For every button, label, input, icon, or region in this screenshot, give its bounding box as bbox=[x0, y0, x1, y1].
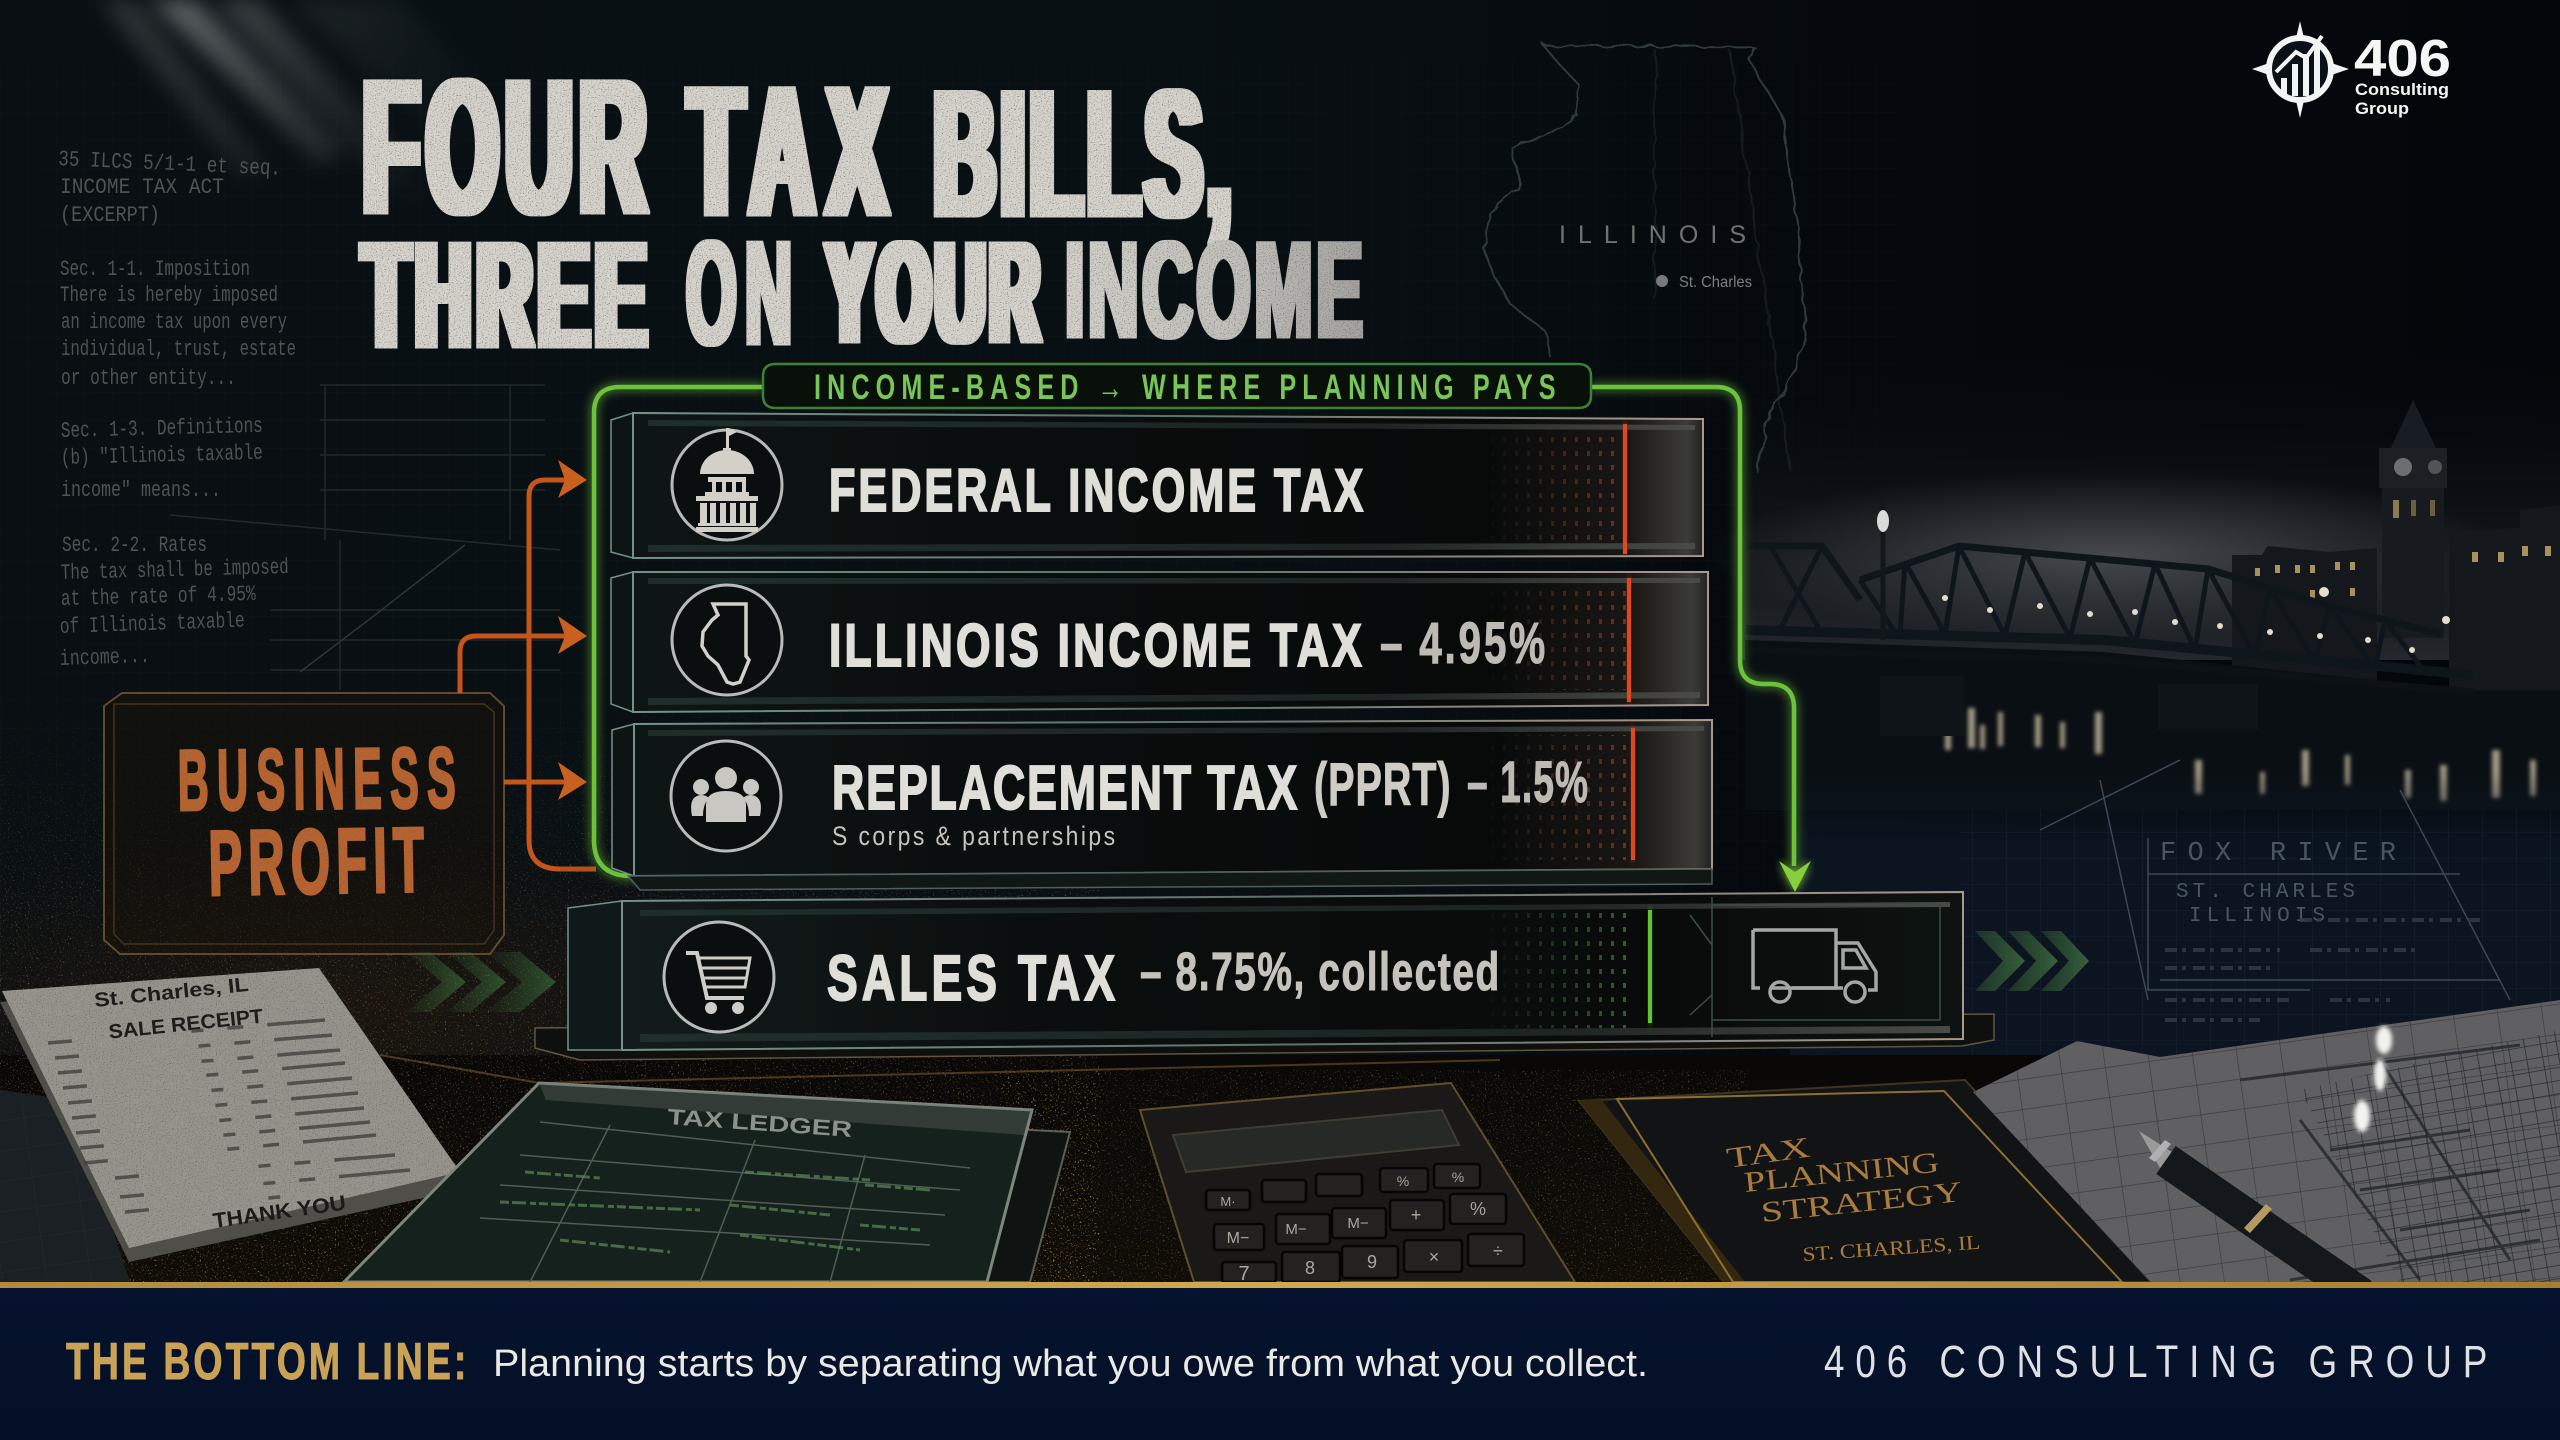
key labels: ÷ bbox=[1493, 1241, 1503, 1261]
key labels: × bbox=[1429, 1247, 1439, 1267]
faded statute excerpt: at the rate of 4.95% bbox=[61, 582, 257, 612]
chevrons: right bbox=[1975, 931, 2089, 991]
key labels: + bbox=[1411, 1205, 1421, 1225]
title: heavy words: TAX bbox=[689, 48, 887, 255]
title: heavy words: BILLS, bbox=[934, 52, 1231, 254]
paper glare bbox=[2354, 1026, 2392, 1132]
sale receipt: SALE RECEIPT bbox=[108, 1006, 264, 1044]
icon: delivery truck bbox=[1753, 930, 1876, 1002]
light rays bbox=[100, 0, 560, 200]
faded statute excerpt: INCOME TAX ACT bbox=[60, 175, 224, 200]
title: heavy words: THREE bbox=[363, 212, 646, 380]
faded statute excerpt: 35 ILCS 5/1-1 et seq. bbox=[58, 147, 282, 182]
title: tighter words: INCOME bbox=[1065, 215, 1363, 367]
book: Tax Planning Strategy bbox=[1579, 1080, 2151, 1282]
river under the bridge bbox=[1745, 640, 2560, 810]
sale receipt bbox=[0, 968, 460, 1262]
key labels: % bbox=[1452, 1169, 1464, 1185]
faded statute excerpt: or other entity... bbox=[61, 366, 236, 391]
faded statute excerpt: Sec. 1-3. Definitions bbox=[61, 414, 263, 444]
key labels bbox=[1220, 1169, 1503, 1285]
icon: compass with chart bbox=[2252, 21, 2349, 118]
book: Tax Planning Strategy: ST. CHARLES, IL bbox=[1802, 1232, 1981, 1266]
blueprint tiny notes bbox=[2165, 920, 2480, 1020]
title: tighter words bbox=[686, 212, 1363, 376]
desk surface bbox=[0, 680, 2100, 1285]
orange flow arrows bbox=[460, 460, 596, 869]
faded statute excerpt: (b) "Illinois taxable bbox=[61, 441, 263, 471]
blueprint overlay: Fox River bbox=[1790, 760, 2560, 1060]
title: heavy words: YOUR bbox=[827, 211, 1039, 373]
clock tower bbox=[2379, 400, 2447, 638]
key labels: M− bbox=[1347, 1215, 1369, 1232]
bottom line bar bbox=[0, 1282, 2560, 1440]
key labels: 7 bbox=[1238, 1263, 1250, 1285]
sale receipt: THANK YOU bbox=[211, 1192, 347, 1233]
business profit box: BUSINESS bbox=[177, 730, 456, 829]
business profit box: PROFIT bbox=[208, 808, 425, 915]
faded statute excerpt: individual, trust, estate bbox=[61, 337, 296, 362]
panel: illinois income tax: – 4.95% bbox=[1380, 611, 1545, 676]
panel: federal income tax bbox=[611, 413, 1703, 558]
panel: sales tax: SALES TAX bbox=[827, 943, 1115, 1014]
map marker: St. Charles: St. Charles bbox=[1679, 274, 1752, 291]
faded statute excerpt: (EXCERPT) bbox=[60, 203, 160, 228]
key labels: 9 bbox=[1367, 1252, 1377, 1272]
panel: replacement tax bbox=[612, 720, 1712, 890]
Illinois map outline bbox=[1483, 45, 1806, 473]
faded statute excerpt: income... bbox=[59, 644, 150, 672]
street lamp bbox=[1880, 497, 1886, 640]
green income frame bbox=[594, 387, 1794, 876]
bridge truss bbox=[1746, 497, 2473, 692]
title bbox=[363, 40, 1363, 380]
blueprint floor plan bbox=[2300, 1030, 2560, 1282]
receipt item rows bbox=[48, 1020, 410, 1212]
blueprint paper under receipt bbox=[0, 1090, 130, 1282]
faded statute excerpt: Sec. 1-1. Imposition bbox=[60, 257, 250, 282]
wordmark: Consulting bbox=[2355, 80, 2449, 99]
faded statute excerpt bbox=[58, 147, 296, 672]
arrowheads bbox=[558, 460, 587, 800]
ledger rules and entries bbox=[480, 1122, 970, 1282]
wordmark: Group bbox=[2355, 99, 2409, 118]
business profit box bbox=[104, 693, 504, 954]
faint ledger and chart behind business profit bbox=[170, 385, 560, 690]
faded statute excerpt: The tax shall be imposed bbox=[61, 555, 289, 586]
icon: Illinois outline bbox=[672, 585, 782, 695]
river light reflections bbox=[1945, 708, 2536, 801]
logo: 406 Consulting Group bbox=[2252, 21, 2451, 118]
panel: replacement tax: (PPRT) bbox=[1314, 751, 1451, 818]
key labels: M· bbox=[1220, 1194, 1236, 1209]
book: Tax Planning Strategy: STRATEGY bbox=[1759, 1176, 1964, 1229]
title: heavy words bbox=[363, 40, 1231, 380]
panel: replacement tax: S corps & partnerships bbox=[832, 821, 1115, 851]
key labels: M− bbox=[1285, 1221, 1307, 1238]
panel: replacement tax: – 1.5% bbox=[1467, 751, 1588, 815]
panel: sales tax: – 8.75%, collected bbox=[1140, 941, 1499, 1001]
key labels: % bbox=[1397, 1173, 1409, 1189]
faded statute excerpt: Sec. 2-2. Rates bbox=[62, 533, 207, 558]
title: tighter words: ON bbox=[686, 212, 792, 376]
key labels: % bbox=[1470, 1199, 1486, 1219]
tax ledger bbox=[344, 1083, 1070, 1282]
icon: capitol bbox=[672, 428, 782, 540]
pen bbox=[2139, 1131, 2362, 1295]
faded statute excerpt: income" means... bbox=[61, 478, 221, 503]
faded statute excerpt: There is hereby imposed bbox=[60, 283, 278, 308]
panel: illinois income tax bbox=[611, 572, 1708, 712]
icon: shopping cart bbox=[664, 922, 774, 1032]
bridge lights bbox=[1942, 587, 2450, 653]
bottom line label: THE BOTTOM LINE: bbox=[66, 1332, 466, 1390]
panel: federal income tax: FEDERAL INCOME TAX bbox=[829, 458, 1363, 525]
green arrowhead to sales panel bbox=[1779, 861, 1811, 892]
book: Tax Planning Strategy: TAX bbox=[1725, 1132, 1812, 1175]
map label: Illinois: ILLINOIS bbox=[1559, 221, 1746, 249]
night scene: river, bridge and clock tower bbox=[1745, 400, 2560, 810]
bridge piers bbox=[1880, 676, 2258, 736]
faded statute excerpt: an income tax upon every bbox=[61, 310, 287, 335]
blueprint overlay: Fox River: ST. CHARLES bbox=[2176, 881, 2355, 904]
calculator bbox=[1140, 1083, 1575, 1285]
panel: illinois income tax: ILLINOIS INCOME TAX bbox=[829, 613, 1362, 680]
book: Tax Planning Strategy: PLANNING bbox=[1742, 1147, 1941, 1199]
wordmark bbox=[2354, 30, 2451, 118]
tax ledger: TAX LEDGER bbox=[667, 1104, 853, 1142]
keys bbox=[1206, 1164, 1524, 1282]
key labels: M− bbox=[1227, 1230, 1249, 1247]
title: heavy words: FOUR bbox=[363, 40, 646, 254]
buildings bbox=[2232, 505, 2560, 690]
blueprint overlay: Fox River: FOX RIVER bbox=[2160, 839, 2396, 869]
wordmark: 406 bbox=[2354, 30, 2451, 88]
income-based pill header: INCOME-BASED → WHERE PLANNING PAYS bbox=[814, 368, 1556, 407]
panel: sales tax bbox=[535, 892, 1994, 1060]
faded statute excerpt: of Illinois taxable bbox=[59, 609, 245, 640]
chevrons: left bbox=[406, 952, 556, 1012]
blueprint sheet and pen bbox=[1973, 1000, 2560, 1295]
bottom line message: Planning starts by separating what you owe from what you collect. bbox=[493, 1343, 1648, 1385]
brand name: 406 CONSULTING GROUP bbox=[1824, 1337, 2487, 1387]
icon: people bbox=[671, 741, 781, 851]
blueprint overlay: Fox River: ILLINOIS bbox=[2189, 905, 2325, 928]
panel: replacement tax: REPLACEMENT TAX bbox=[832, 754, 1297, 823]
sale receipt: St. Charles, IL bbox=[93, 974, 250, 1012]
key labels: 8 bbox=[1305, 1258, 1315, 1278]
